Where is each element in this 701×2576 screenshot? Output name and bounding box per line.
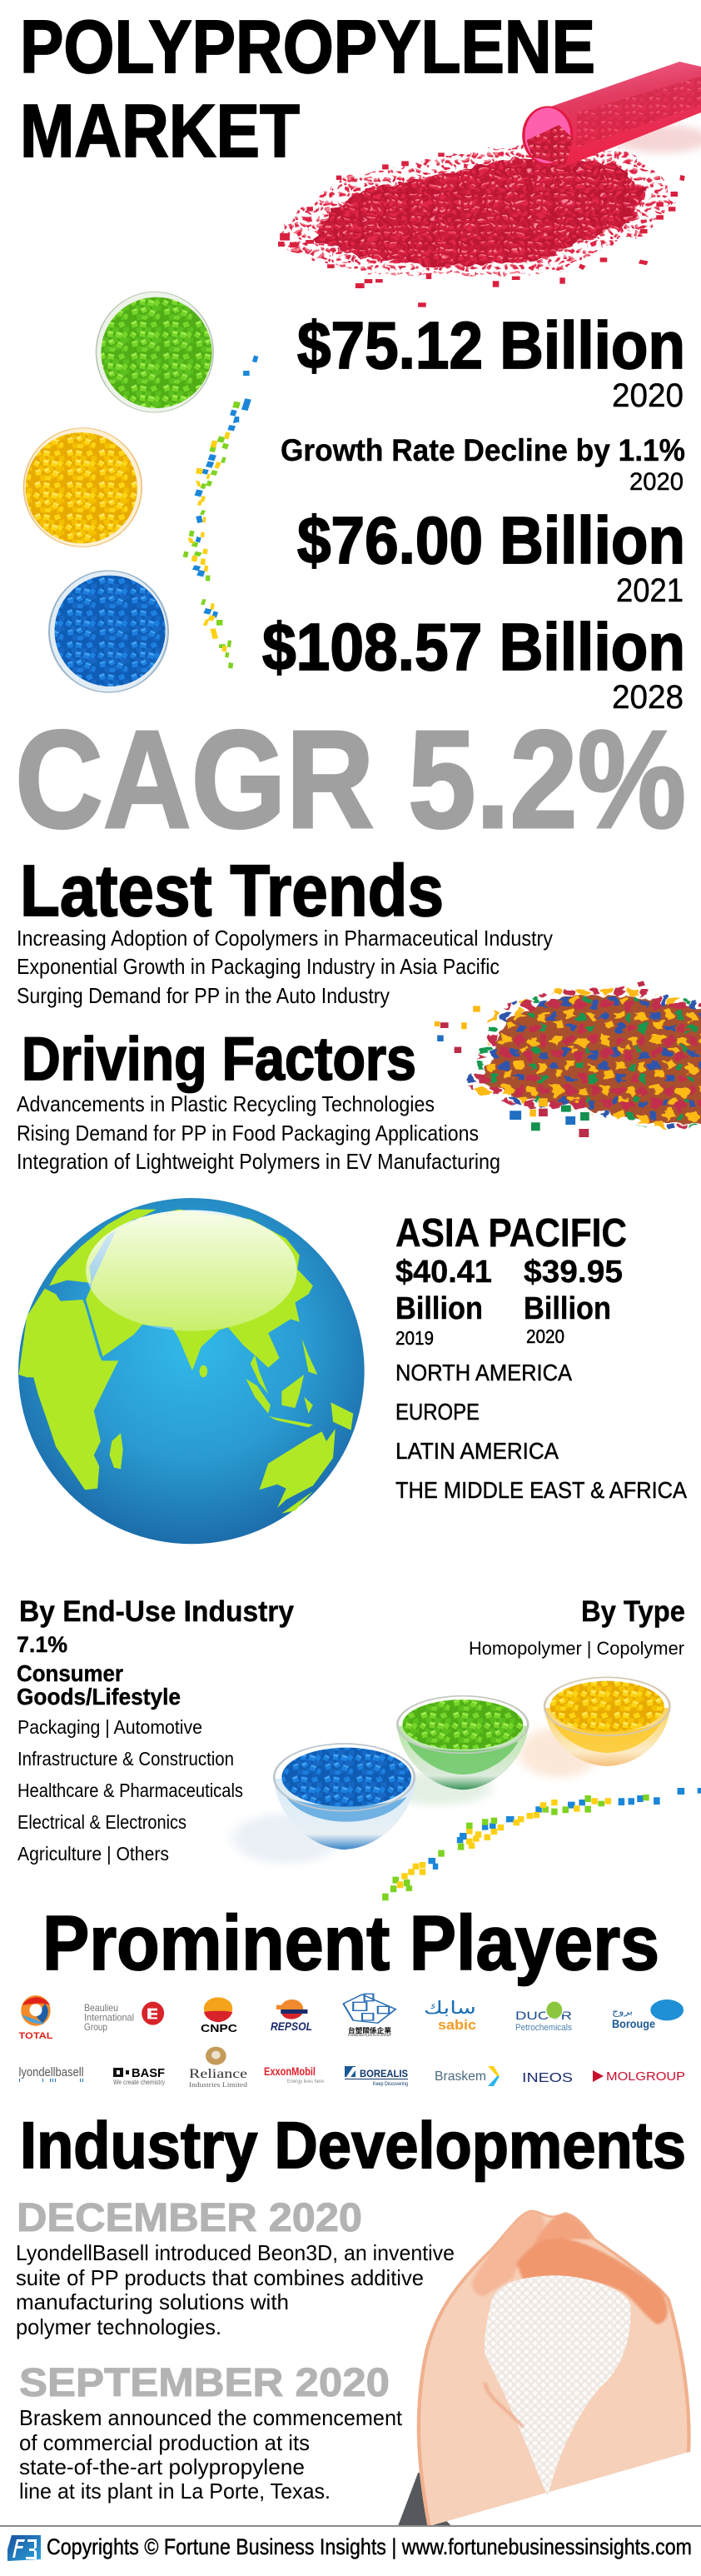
event: September 2020 (19, 2361, 403, 2504)
text: leading segment (17, 1632, 181, 1710)
event: September 2020: line at its plant in La Porte, Texas. (19, 2479, 331, 2504)
logo: Ducor Petrochemicals: DUCOR (515, 2009, 572, 2022)
text: other regions (395, 1360, 687, 1503)
event: December 2020: DECEMBER 2020 (17, 2196, 362, 2240)
logo: BASF: BASF (132, 2066, 165, 2080)
text: driving factors list: Integration of Lightweight Polymers in EV Manufacturing (17, 1149, 500, 1174)
logo: LyondellBasell: lyondellbasell (18, 2065, 83, 2079)
logo: Repsol (271, 1999, 312, 2033)
text: Asia Pacific block: Billion (524, 1291, 611, 1326)
logo: Beaulieu International Group: Beaulieu (84, 2002, 118, 2014)
logo: Reliance: Industries Limited (189, 2080, 248, 2089)
logo: Total: TOTAL (18, 2031, 53, 2041)
logo: ExxonMobil: ExxonMobil (264, 2064, 316, 2078)
logo: Borealis (345, 2066, 408, 2087)
text: leading segment: 7.1% (17, 1632, 67, 1657)
image: green pellet dish (96, 292, 213, 412)
image: multicoloured pellet pile (435, 981, 701, 1137)
text: Asia Pacific block: $39.95 (524, 1255, 623, 1290)
event: September 2020: state-of-the-art polypropylene (19, 2454, 305, 2479)
text: other regions: LATIN AMERICA (395, 1438, 559, 1464)
logo: Repsol: REPSOL (271, 2019, 312, 2033)
logo: ExxonMobil: Energy lives here (287, 2079, 325, 2084)
text: type list: Homopolymer | Copolymer (469, 1638, 684, 1659)
stat: 2028 market size: 2028 (612, 679, 684, 716)
logo: Borouge: بروج (612, 2007, 633, 2017)
logo: Total (18, 1995, 53, 2041)
middle fingers (534, 2214, 593, 2252)
text: other regions: EUROPE (395, 1399, 480, 1425)
logo: CNPC (201, 1997, 238, 2034)
text: Asia Pacific block: ASIA PACIFIC (395, 1211, 627, 1256)
logo: Ducor Petrochemicals: Petrochemicals (515, 2023, 572, 2033)
image: globe (18, 1198, 365, 1544)
event: December 2020: suite of PP products that combines additive (16, 2265, 424, 2290)
event: December 2020: polymer technologies. (16, 2314, 221, 2339)
image: three glass bowls of pellets (232, 1677, 670, 1864)
logo: Reliance (189, 2047, 248, 2089)
title: POLYPROPYLENE (20, 6, 595, 89)
icon: Fortune Business Insights logo (7, 2535, 41, 2561)
logo: Beaulieu International Group: Group (84, 2021, 107, 2033)
text: end-use list: Infrastructure & Construction (17, 1748, 234, 1770)
text: end-use list: Packaging | Automotive (17, 1716, 202, 1738)
stat: 2021 market size (297, 503, 685, 609)
stat: growth rate decline: 2020 (629, 468, 684, 496)
decoration: trail of coloured pellets (183, 417, 239, 669)
decoration: curved pellet trail (382, 1788, 701, 1900)
bowl: green (397, 1696, 529, 1790)
logo: Braskem: Braskem (435, 2069, 486, 2084)
event: December 2020: LyondellBasell introduced Beon3D, an inventive (16, 2240, 455, 2265)
logo: BASF: We create chemistry (113, 2079, 165, 2086)
text: latest trends list: Exponential Growth in Packaging Industry in Asia Pacific (17, 954, 500, 979)
logo: MOL Group: MOLGROUP (606, 2069, 685, 2084)
logo: Borouge (612, 1999, 684, 2030)
text: latest trends list: Increasing Adoption of Copolymers in Pharmaceutical Industry (17, 926, 553, 951)
event: December 2020 (16, 2196, 455, 2339)
text: latest trends list: Surging Demand for PP in the Auto Industry (17, 983, 390, 1008)
logo: Formosa Plastics Group: 台塑關係企業 (348, 2026, 391, 2034)
text: end-use list: Electrical & Electronics (17, 1811, 186, 1833)
text: Asia Pacific block: Billion (395, 1291, 483, 1326)
logo: Ducor Petrochemicals (515, 2001, 572, 2033)
wrist crease (485, 2383, 523, 2427)
logo: Formosa Plastics Group (343, 1994, 395, 2037)
text: end-use list (17, 1716, 243, 1865)
image: yellow pellet dish (23, 428, 142, 547)
logo: Borealis: BOREALIS (360, 2068, 408, 2079)
logo: Braskem (435, 2066, 500, 2086)
stat: growth rate decline (281, 433, 685, 496)
image: cupped hands holding white pellets (398, 2211, 689, 2526)
heading: by end-use industry: By End-Use Industry (19, 1595, 295, 1628)
text: end-use list: Agriculture | Others (17, 1843, 169, 1865)
text: Asia Pacific block (395, 1211, 627, 1349)
stat: 2028 market size (262, 610, 685, 716)
text: Asia Pacific block: 2019 (395, 1327, 434, 1349)
heading: latest trends: Latest Trends (20, 851, 444, 931)
text: leading segment: Consumer (17, 1660, 123, 1686)
event: September 2020: SEPTEMBER 2020 (19, 2361, 390, 2405)
bowl: blue (274, 1744, 415, 1850)
logo: BASF (113, 2066, 165, 2086)
hand base (419, 2211, 689, 2526)
logo: Sabic: sabic (438, 2017, 476, 2033)
decoration: top of pellet trail (230, 356, 258, 417)
pellets in palm (485, 2275, 631, 2497)
text: latest trends list (17, 926, 553, 1008)
logo: Beaulieu International Group: International (84, 2011, 134, 2023)
heading: by type: By Type (581, 1595, 685, 1628)
text: Asia Pacific block: $40.41 (395, 1255, 492, 1290)
title (20, 6, 595, 173)
logo: Sabic: سابك (424, 1999, 476, 2018)
text: driving factors list: Advancements in Plastic Recycling Technologies (17, 1091, 435, 1116)
text: Asia Pacific block: 2020 (526, 1325, 564, 1347)
bowl: yellow (544, 1677, 670, 1766)
heading: driving factors: Driving Factors (22, 1026, 416, 1093)
stat: growth rate decline: Growth Rate Decline by 1.1% (281, 433, 685, 467)
stat: 2020 market size: 2020 (612, 377, 684, 414)
logo: Beaulieu International Group (84, 2002, 164, 2033)
text: driving factors list: Rising Demand for PP in Food Packaging Applications (17, 1121, 479, 1146)
stat: 2021 market size: 2021 (616, 572, 684, 609)
logo: CNPC: CNPC (201, 2022, 238, 2034)
logo: Reliance: Reliance (189, 2067, 247, 2081)
event: December 2020: manufacturing solutions with (16, 2289, 289, 2314)
image: blue pellet dish (49, 571, 168, 692)
text: end-use list: Healthcare & Pharmaceuticals (17, 1780, 243, 1801)
logo: ExxonMobil (264, 2064, 325, 2084)
event: September 2020: Braskem announced the commencement (19, 2405, 403, 2430)
thumbs (516, 2239, 668, 2324)
text: leading segment: Goods/Lifestyle (17, 1684, 181, 1710)
logo: Ineos: INEOS (522, 2071, 573, 2085)
logo: Formosa Plastics Group: FORMOSA PLASTICS GROUP (348, 2034, 392, 2037)
logo: Sabic (424, 1999, 476, 2033)
event: September 2020: of commercial production at its (19, 2430, 310, 2455)
text: driving factors list (17, 1091, 500, 1174)
logo: Borouge: Borouge (612, 2017, 655, 2030)
logo: Borealis: Keep Discovering (373, 2082, 408, 2087)
image: red pellets spilling from test tube (277, 62, 701, 307)
stat: 2020 market size (297, 308, 685, 414)
text: other regions: NORTH AMERICA (395, 1360, 572, 1385)
left fingers (472, 2212, 544, 2297)
title: MARKET (20, 90, 300, 173)
